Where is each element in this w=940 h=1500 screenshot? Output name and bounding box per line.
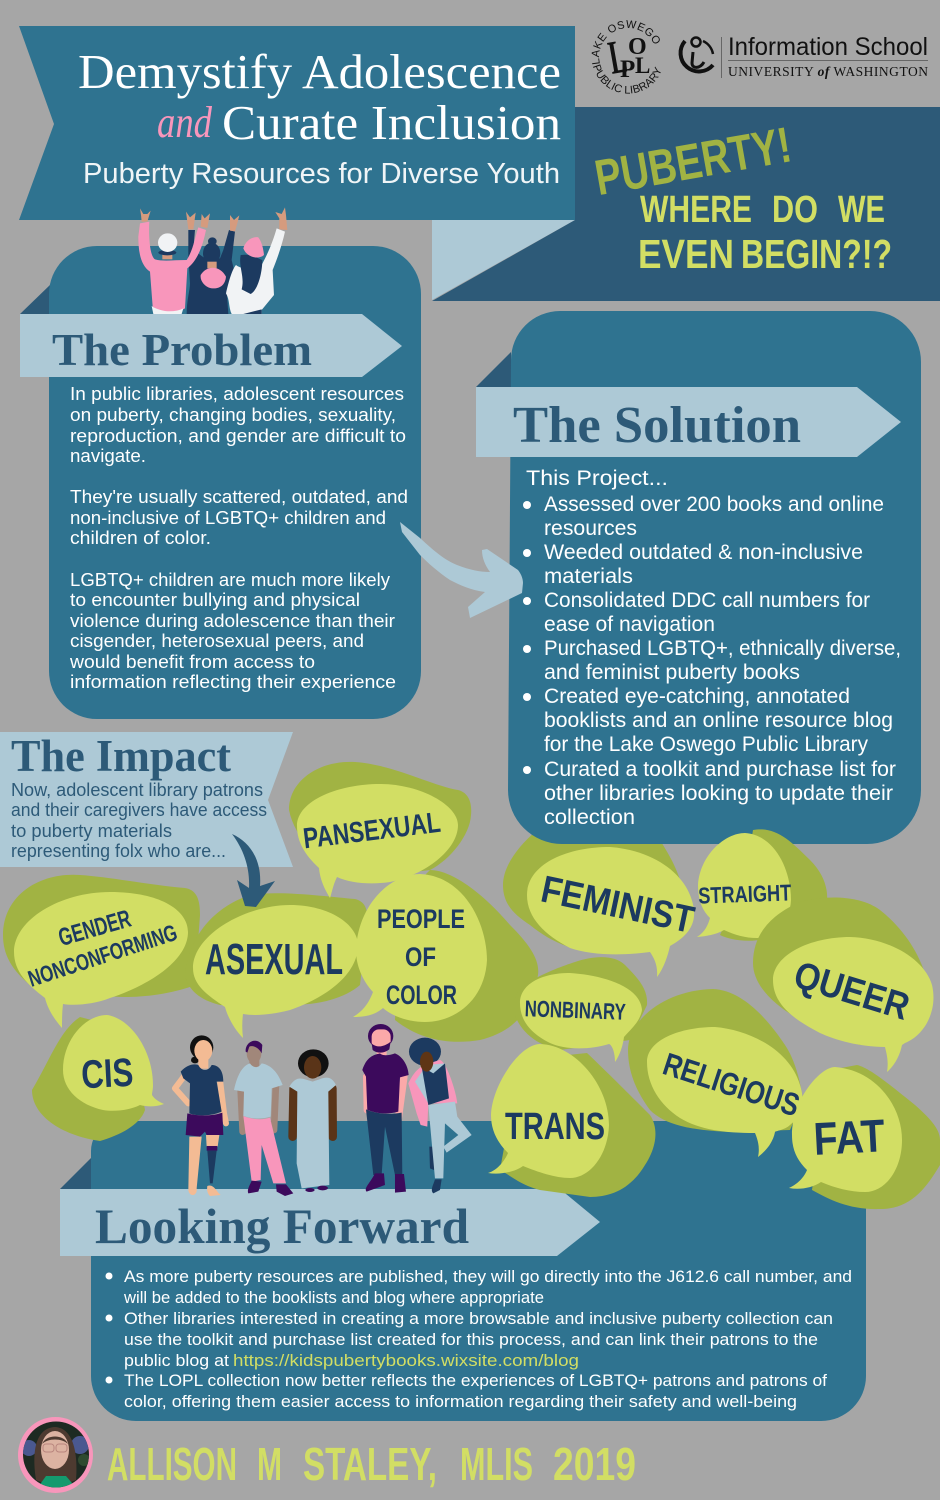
illustration: three friends waving	[138, 207, 287, 314]
text: solution list: Curated a toolkit and purchase list for	[544, 758, 896, 781]
text: looking forward bullets: will be added to the booklists and blog where appropriate	[123, 1288, 544, 1307]
heading banner: looking forward	[60, 1189, 600, 1256]
text: where do we: WE	[838, 189, 885, 231]
bubble: queer: QUEER	[789, 954, 914, 1029]
text: even begin: EVEN	[638, 231, 734, 277]
text: impact body: Now, adolescent library patrons	[11, 780, 263, 800]
bubble: pansexual: PANSEXUAL	[301, 807, 442, 855]
bubble: feminist	[503, 832, 698, 977]
heading: puberty: PUBERTY!	[591, 116, 795, 206]
bubble: pansexual	[289, 762, 471, 898]
bubble: people of color	[353, 870, 538, 1042]
text: looking forward bullets	[106, 1267, 852, 1411]
person 2	[234, 1041, 293, 1196]
text: University of Washington: UNIVERSITY of WASHINGTON	[728, 64, 928, 79]
bubble: feminist: FEMINIST	[537, 869, 698, 942]
panel: puberty question banner	[432, 107, 940, 301]
footer: author name: ALLISON	[107, 1438, 237, 1490]
text: problem body: non-inclusive of LGBTQ+ children and	[70, 508, 386, 528]
text: solution list: Purchased LGBTQ+, ethnically diverse,	[544, 637, 901, 660]
panel: the impact	[0, 731, 293, 867]
text: impact body: and their caregivers have access	[11, 800, 267, 820]
text: solution list: Created eye-catching, annotated	[544, 685, 850, 708]
text: where do we	[640, 189, 885, 231]
text: looking forward bullets: public blog at	[124, 1351, 229, 1370]
person 1	[175, 1035, 226, 1196]
text: even begin	[638, 231, 892, 277]
bubble: gender nonconforming	[3, 875, 200, 1028]
arrow: impact down	[232, 834, 275, 907]
heading banner: the solution	[476, 387, 901, 457]
text: problem body: information reflecting their experience	[70, 672, 396, 692]
speech bubbles group	[3, 762, 940, 1421]
text: solution list: Consolidated DDC call numbers for	[544, 589, 870, 612]
bubble: trans: TRANS	[505, 1106, 605, 1148]
bubble: people of color: COLOR	[386, 980, 457, 1010]
text: where do we: WHERE	[640, 189, 752, 231]
person 4	[362, 1024, 409, 1193]
heading banner: looking forward: Looking Forward	[95, 1198, 469, 1254]
logo: Lake Oswego Public Library: PUBLIC LIBRARY	[593, 64, 661, 94]
text: solution list: and feminist puberty books	[544, 661, 800, 684]
text: problem body: children of color.	[70, 528, 211, 548]
panel: looking forward	[60, 1121, 866, 1421]
bubble: religious: RELIGIOUS	[659, 1046, 804, 1123]
title ribbon	[19, 26, 575, 220]
logo: Lake Oswego Public Library: P	[620, 56, 635, 83]
text: solution list: Assessed over 200 books and online	[544, 493, 884, 516]
subtitle: Puberty Resources for Diverse Youth	[83, 158, 560, 190]
text: where do we: DO	[772, 189, 818, 231]
bubble: gender nonconforming: GENDER	[55, 905, 134, 952]
arrow: problem to solution	[400, 522, 523, 618]
person 3	[289, 1049, 336, 1192]
text: problem body: would benefit from access to	[69, 652, 315, 672]
bubble: trans	[488, 1044, 655, 1197]
panel: the solution	[476, 311, 921, 844]
text: solution list: resources	[544, 517, 637, 540]
text: solution list: Weeded outdated & non-inclusive	[544, 541, 863, 564]
bubble: straight: STRAIGHT	[698, 879, 792, 909]
bubble: cis: CIS	[80, 1051, 134, 1097]
logo: Lake Oswego Public Library: L	[605, 30, 631, 85]
text: problem body: They're usually scattered, outdated, and	[70, 487, 408, 507]
bubble: cis	[32, 1015, 164, 1141]
text: problem body: navigate.	[70, 446, 146, 466]
text: impact body: representing folx who are...	[11, 841, 226, 861]
footer: author name	[107, 1438, 636, 1490]
text: solution list: ease of navigation	[544, 613, 715, 636]
text: solution list	[523, 467, 901, 829]
logo: Lake Oswego Public Library: LAKE OSWEGO	[592, 20, 660, 64]
footer: author name: MLIS	[460, 1438, 533, 1490]
heading banner: the problem	[20, 314, 402, 377]
text: problem body: on puberty, changing bodies, sexuality,	[70, 405, 396, 425]
title line 1: Demystify Adolescence	[78, 44, 561, 99]
text: problem body: In public libraries, adolescent resources	[70, 384, 404, 404]
text: problem body: violence during adolescence than their	[70, 611, 395, 631]
heading banner: the problem: The Problem	[52, 324, 312, 375]
subheading: this project: This Project...	[526, 467, 668, 490]
text: problem body	[69, 384, 408, 692]
text: even begin: BEGIN?!?	[741, 231, 892, 277]
text: problem body: LGBTQ+ children are much more likely	[70, 570, 390, 590]
bubble: people of color: OF	[405, 942, 436, 972]
bubble: gender nonconforming: NONCONFORMING	[25, 919, 180, 992]
footer: author name: 2019	[553, 1438, 636, 1490]
logo: Lake Oswego Public Library: L	[635, 53, 650, 78]
person 5	[408, 1038, 472, 1193]
text: looking forward bullets: The LOPL collection now better reflects the experiences of LGBTQ+ patrons and patrons of	[124, 1371, 827, 1390]
logo: Information School	[681, 33, 928, 79]
bubble: fat: FAT	[812, 1109, 886, 1165]
text: impact body	[11, 780, 267, 861]
text: problem body: to encounter bullying and physical	[70, 590, 360, 610]
bubble: fat	[789, 1065, 940, 1209]
text: looking forward bullets: https://kidspubertybooks.wixsite.com/blog	[233, 1351, 579, 1370]
bubble: nonbinary: NONBINARY	[524, 995, 626, 1025]
footer: author portrait	[18, 1417, 93, 1493]
text: looking forward bullets: As more puberty resources are published, they will go directly into the J612.6 call number, and	[124, 1267, 852, 1286]
text: problem body: reproduction, and gender are difficult to	[70, 426, 406, 446]
text: looking forward bullets: use the toolkit and purchase list created for this process, and can link their patrons to the	[124, 1330, 818, 1349]
footer: author name: STALEY,	[303, 1438, 437, 1490]
title line 2: Curate Inclusion	[222, 95, 561, 150]
footer: author name: M	[257, 1438, 282, 1490]
bubble: religious	[628, 989, 804, 1157]
bubble: nonbinary	[515, 957, 647, 1062]
heading banner: the solution: The Solution	[513, 397, 801, 454]
text: problem body: cisgender, heterosexual peers, and	[70, 631, 364, 651]
text: impact body: to puberty materials	[11, 821, 172, 841]
text: solution list: other libraries looking to update their	[544, 782, 893, 805]
text: Information School: Information School	[728, 33, 928, 61]
text: solution list: collection	[544, 806, 635, 829]
bubble: straight	[697, 829, 827, 941]
text: looking forward bullets: Other libraries interested in creating a more browsable and inclusive puberty collection can	[124, 1309, 833, 1328]
text: looking forward bullets: color, offering them easier access to information regarding their safety and well-being	[124, 1392, 797, 1411]
illustration: five diverse people	[175, 1024, 472, 1196]
title word: and: and	[157, 98, 213, 147]
bubble: people of color: PEOPLE	[377, 904, 465, 934]
bubble: asexual: ASEXUAL	[205, 935, 343, 984]
logo: Lake Oswego Public Library: O	[628, 34, 647, 60]
bubble: queer	[753, 897, 933, 1072]
text: solution list: materials	[544, 565, 633, 588]
logo: Lake Oswego Public Library	[592, 20, 661, 94]
heading: the impact: The Impact	[11, 731, 231, 781]
text: solution list: for the Lake Oswego Public Library	[544, 733, 868, 756]
panel: the problem	[20, 246, 421, 719]
text: solution list: booklists and an online resource blog	[544, 709, 893, 732]
bubble: asexual	[185, 893, 367, 1038]
